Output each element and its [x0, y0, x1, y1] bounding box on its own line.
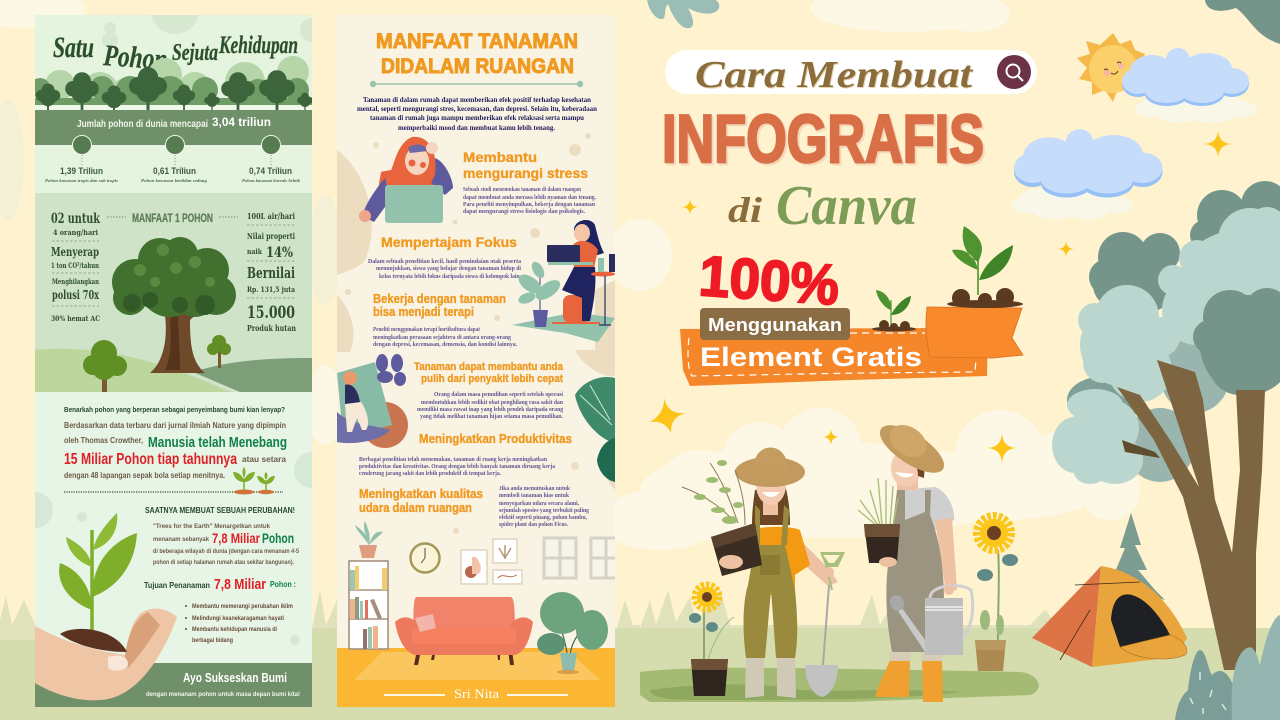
benefits left: polusi 70x: [52, 288, 99, 302]
footer band: dengan menanam pohon untuk masa depan bumi kita!: [146, 691, 300, 698]
section: air quality: Meningkatkan kualitas: [359, 487, 483, 501]
section: recover: [414, 361, 564, 420]
section: recover: Orang dalam masa pemulihan seperti setelah operasi: [434, 392, 563, 398]
title: infografis: INFOGRAFIS: [664, 103, 986, 179]
section: focus: [368, 234, 521, 280]
section: recover: memiliki masa rawat inap yang lebih pendek daripada orang: [417, 407, 563, 413]
section: recover: yang tidak melihat tanaman hijau selama masa pemulihan.: [420, 414, 563, 420]
section: time to change: Pohon :: [270, 579, 296, 589]
intro text: tanaman di rumah juga mampu memberikan efek relaksasi serta mampu: [370, 114, 584, 122]
benefits right: 15.000: [247, 303, 295, 323]
section: focus: menunjukkan, siswa yang belajar dengan tanaman hidup di: [376, 266, 521, 272]
icon: sun: [1077, 33, 1145, 102]
grass plant in pot: [858, 478, 900, 567]
section: time to change: di beberapa wilayah di dunia (dengan cara menanam 4-5: [153, 549, 300, 555]
title: infografis: INFOGRAFIS: [662, 101, 984, 177]
watering can: [887, 585, 973, 655]
bullet list: Membantu kehidupan manusia di: [192, 627, 277, 633]
forest row: [30, 56, 313, 114]
icon: search: [997, 55, 1031, 89]
benefits left: Menyerap: [51, 245, 99, 259]
cloud: middle: [1012, 129, 1163, 219]
section: stress: [463, 150, 596, 215]
section: productivity: Meningkatkan Produktivitas: [419, 432, 572, 446]
section: text about felling: Manusia telah Menebang: [148, 434, 287, 451]
section: productivity: produktivitas dan kreativitas. Orang dengan lebih banyak tanaman diruang kerja: [359, 464, 555, 470]
shelf plant: [355, 521, 383, 558]
section: manfaat 1 pohon: [35, 193, 312, 393]
overalls: [886, 490, 944, 652]
small trees: [83, 335, 231, 393]
intro text: mental, seperti mengurangi stres, kecemasan, dan depresi. Selain itu, keberadaan: [357, 105, 597, 113]
ribbon: element gratis: Element Gratis: [700, 342, 922, 372]
section: time to change: Pohon: [262, 530, 294, 546]
man gardener: [858, 416, 973, 702]
section: productivity: Berbagai penelitian telah menemukan, tanaman di ruang kerja meningkatkan: [359, 457, 548, 463]
section: manfaat 1 pohon: MANFAAT 1 POHON: [132, 211, 213, 225]
ribbon: element gratis: [680, 307, 1023, 386]
section: therapy: [373, 292, 517, 348]
section: recover: pulih dari penyakit lebih cepat: [421, 373, 563, 385]
stat: 0,61 triliun: 0,61 Triliun: [153, 166, 196, 176]
foliage: [1052, 0, 1280, 484]
section: focus: kelas ternyata lebih fokus daripada siswa di kelompok lain.: [379, 274, 521, 280]
panel: manfaat tanaman: [337, 15, 621, 707]
section: time to change: pohon di setiap halaman rumah atau sekitar bangunan).: [153, 560, 294, 566]
stat: 0,61 triliun: [141, 136, 208, 183]
boots: [745, 658, 796, 698]
intro text: Tanaman di dalam rumah dapat memberikan efek positif terhadap kesehatan: [363, 96, 591, 104]
big tree: [1052, 0, 1280, 670]
windows: [544, 538, 621, 578]
section: text about felling: 15 Miliar Pohon tiap tahunnya: [64, 451, 237, 468]
trunk: [1117, 360, 1265, 670]
section: stress: dapat mengurangi stress fisiologis dan psikologis.: [463, 209, 585, 215]
bookshelf: [349, 561, 388, 649]
heading: MANFAAT TANAMAN: [376, 30, 578, 53]
section: time to change: "Trees for the Earth" Menargetkan untuk: [153, 523, 270, 530]
stat: 0,74 triliun: [242, 136, 301, 183]
section: time to change: 7,8 Miliar: [212, 530, 260, 546]
section: text about felling: atau setara: [242, 455, 287, 464]
search pill: cara membuat: Cara Membuat: [696, 55, 975, 97]
section: stress: Sebuah studi menemukan tanaman di dalam ruangan: [463, 187, 582, 193]
plant: small seedling: [872, 290, 916, 332]
tent: [1032, 566, 1187, 667]
shirt and arm: [897, 487, 954, 540]
section: air quality: efektif seperti pinang, pohon bambu,: [499, 515, 587, 521]
section: therapy: bisa menjadi terapi: [373, 305, 474, 319]
heading: [370, 30, 583, 87]
title: Satu: [53, 31, 94, 64]
section: time to change: menanam sebanyak: [153, 536, 209, 543]
section: air quality: spider plant dan pohon Ficus.: [499, 522, 568, 528]
section: time to change: 7,8 Miliar: [214, 576, 266, 593]
label: menggunakan: Menggunakan: [708, 315, 842, 335]
section: recover: membutuhkan lebih sedikit obat penghilang rasa sakit dan: [421, 400, 564, 406]
sunflower right with pot: [975, 517, 1018, 671]
badge: 100 percent: 100%: [697, 244, 841, 318]
section: therapy: Bekerja dengan tanaman: [373, 292, 506, 306]
section: stress: mengurangi stress: [463, 166, 588, 181]
section: text about felling: [35, 392, 312, 645]
overalls: [755, 505, 789, 545]
floor monstera: [537, 592, 608, 674]
label: menggunakan: [700, 308, 850, 340]
intro text: [357, 96, 597, 132]
stars: [650, 129, 1233, 465]
title: di canva: Canva: [776, 175, 917, 237]
section: focus: Mempertajam Fokus: [381, 234, 517, 250]
benefits left: Menghilangkan: [52, 277, 99, 286]
bullet list: Melindungi keanekaragaman hayati: [192, 616, 284, 622]
benefits right: naik: [247, 247, 262, 256]
sunflower left with pot: [689, 586, 734, 696]
head and hat: [897, 475, 918, 490]
section: therapy: meningkatkan perasaan sejahtera di antara orang-orang: [373, 335, 511, 341]
title: Sejuta: [172, 40, 218, 66]
benefits right: 100L air/hari: [247, 211, 295, 221]
illustration: living room: [337, 521, 621, 707]
panel: satu pohon sejuta kehidupan: [35, 15, 312, 707]
boots: [875, 660, 943, 702]
pine tree: [1111, 513, 1165, 600]
section: text about felling: oleh Thomas Crowther,: [64, 436, 143, 445]
wall frames: [461, 539, 522, 584]
benefits right: Produk hutan: [247, 323, 297, 333]
section: text about felling: Benarkah pohon yang berperan sebagai penyeimbang bumi kian lenyap?: [64, 405, 285, 414]
bush: bottom right: [1175, 615, 1280, 720]
clock: [410, 544, 440, 572]
benefits right: Nilai properti: [247, 231, 295, 241]
benefits left: 4 orang/hari: [53, 228, 98, 237]
section: time to change: SAATNYA MEMBUAT SEBUAH PERUBAHAN!: [145, 506, 295, 515]
section: air quality: Jika anda memutuskan untuk: [499, 486, 571, 492]
section: productivity: [359, 432, 572, 477]
stat: 0,61 triliun: Pohon kawasan beriklim sedang: [141, 178, 208, 183]
cloud: top right: [1122, 48, 1257, 123]
section: text about felling: Berdasarkan data terbaru dari jurnal ilmiah Nature yang dipimpin: [64, 421, 286, 430]
bullet list: Membantu memerangi perubahan iklim: [192, 604, 293, 610]
sofa: [395, 597, 533, 665]
section: air quality: [359, 486, 589, 528]
section: therapy: dengan depresi, kecemasan, demensia, dan kondisi lainnya.: [373, 342, 517, 348]
benefits left: 02 untuk: [51, 211, 100, 227]
benefits right: Bernilai: [247, 264, 295, 282]
illustration: monstera wall plant: [575, 377, 615, 482]
intro text: memperbaiki mood dan membuat kamu lebih tenang.: [398, 124, 555, 132]
section: therapy: Peneliti menggunakan terapi hortikultura dapat: [373, 327, 480, 333]
title: Pohon: [102, 39, 169, 76]
woman gardener: [682, 448, 845, 698]
sprouts: [233, 467, 275, 494]
shirt: [742, 527, 810, 595]
benefits right: 14%: [266, 245, 293, 261]
section: time to change: Tujuan Penanaman: [144, 580, 210, 590]
stat: 1,39 triliun: [45, 136, 118, 183]
seedling and hand: [35, 513, 177, 700]
plant in pot: [682, 460, 762, 576]
arm and hair: [752, 485, 790, 525]
illustration: recovering patient: [337, 354, 408, 448]
benefits left: 1 ton CO²/tahun: [51, 261, 99, 270]
section: text about felling: dengan 48 lapangan sepak bola setiap menitnya.: [64, 471, 225, 480]
illustration: stressed woman: [359, 137, 453, 223]
benefits left: [51, 211, 101, 323]
section: focus: Dalam sebuah penelitian kecil, hasil pemindaian otak peserta: [368, 259, 521, 265]
footer band: Ayo Sukseskan Bumi: [183, 670, 287, 685]
signature: Sri Nita: [454, 686, 499, 701]
section: productivity: cenderung jarang sakit dan lebih produktif di tempat kerja.: [359, 471, 501, 477]
plant: large seedling: [947, 226, 1023, 308]
heading: DIDALAM RUANGAN: [381, 55, 574, 78]
title: [53, 35, 298, 68]
band: total trees: [35, 110, 312, 145]
title: Kehidupan: [218, 32, 298, 59]
benefits right: Rp. 131,5 juta: [247, 285, 296, 294]
search pill: cara membuat: [665, 50, 1037, 97]
band: total trees: 3,04 triliun: [212, 115, 271, 129]
benefits right: [247, 211, 297, 333]
benefits left: 30% hemat AC: [51, 314, 101, 323]
ground patch: [640, 668, 1039, 702]
stat: 1,39 triliun: 1,39 Triliun: [60, 166, 103, 176]
ribbon tail: [926, 307, 1023, 358]
stat: 1,39 triliun: Pohon kawasan tropis dan sub tropis: [45, 178, 118, 183]
stat: 0,74 triliun: Pohon kawasan boreals Arktik: [242, 178, 301, 183]
section: air quality: udara dalam ruangan: [359, 501, 472, 515]
section: air quality: menyegarkan udara secara alami,: [499, 501, 579, 507]
illustration: woman at laptop: [512, 220, 615, 342]
section: recover: Tanaman dapat membantu anda: [414, 361, 564, 373]
footer band: [35, 663, 312, 707]
illustration: potted plant: [518, 262, 560, 327]
tree illustration: [112, 237, 236, 373]
section: stress: dapat membuat anda merasa lebih nyaman dan tenang.: [463, 195, 596, 201]
section: stress: Para peneliti menyimpulkan, bekerja dengan tanaman: [463, 202, 596, 208]
stat: 0,74 triliun: 0,74 Triliun: [249, 166, 292, 176]
bullet list: [185, 604, 293, 644]
bullet list: berbagai bidang: [192, 638, 233, 644]
shovel: [805, 552, 845, 697]
band: total trees: Jumlah pohon di dunia mencapai: [77, 118, 208, 130]
head and hat: [763, 500, 778, 515]
section: air quality: sejumlah spesies yang terbukti paling: [499, 508, 589, 514]
title: di canva: di: [728, 190, 762, 230]
section: air quality: membeli tanaman hias untuk: [499, 493, 570, 499]
section: stress: Membantu: [463, 150, 537, 165]
section: time to change: [144, 506, 300, 644]
search pill: cara membuat: Cara Membuat: [695, 54, 974, 96]
